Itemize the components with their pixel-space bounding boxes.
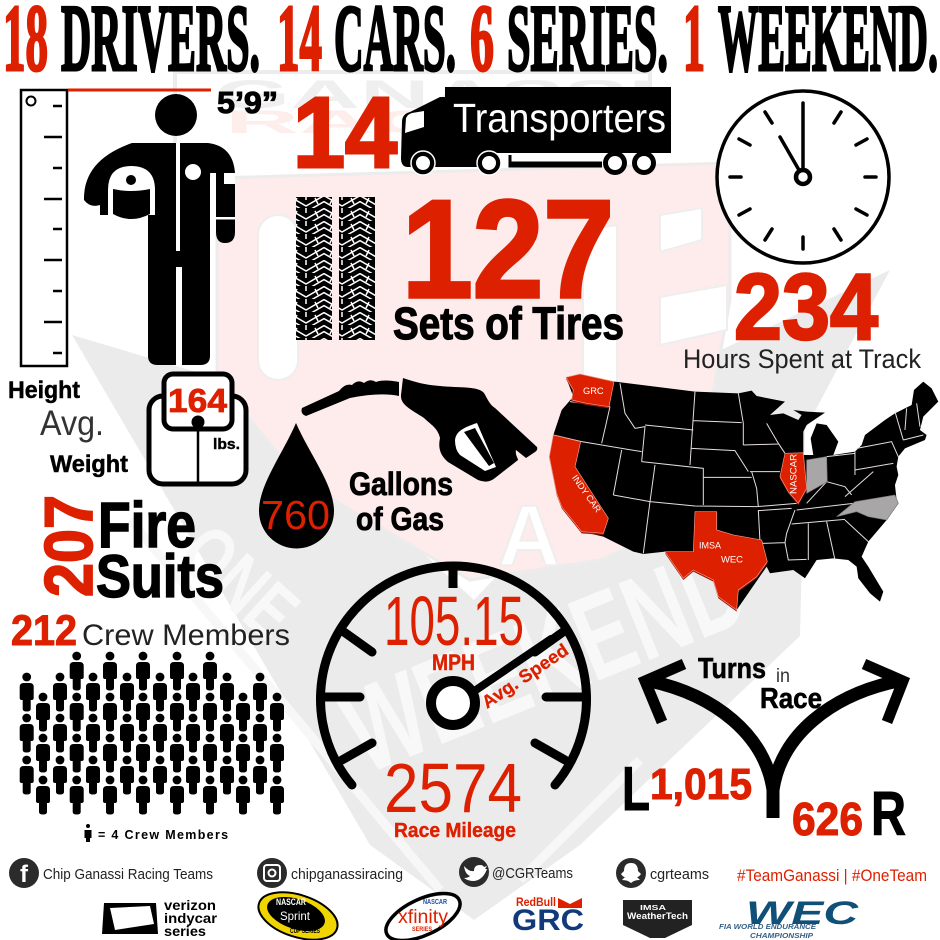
- background watermark logo: WEEKEND: [324, 517, 764, 799]
- logo: WEC: CHAMPIONSHIP: [750, 931, 814, 940]
- right turns: 626: [792, 793, 863, 845]
- logo: WEC: FIA WORLD ENDURANCE: [719, 922, 817, 931]
- turns label: [698, 653, 822, 715]
- icon: driver figure with helmet: [84, 94, 235, 365]
- icon: US map with highlighted states: IMSA: [699, 540, 721, 550]
- logo: IMSA weathertech: WeatherTech: [627, 911, 688, 921]
- icon: US map with highlighted states: INDY CAR: [570, 473, 603, 515]
- gas label: Gallons: [349, 466, 453, 502]
- logo: verizon indycar series: [102, 897, 218, 939]
- icon: transporter truck: [401, 87, 671, 175]
- speedometer gauge: [320, 566, 587, 842]
- icon: US map with highlighted states: [549, 374, 938, 612]
- logo: verizon indycar series: series: [164, 923, 206, 939]
- logo: nascar sprint cup: NASCAR: [276, 897, 306, 907]
- logo: nascar xfinity: SERIES: [412, 927, 432, 933]
- logo: nascar xfinity: NASCAR: [423, 899, 447, 906]
- avg caption: Avg.: [40, 404, 104, 443]
- height caption: Height: [8, 377, 80, 404]
- hours label: Hours Spent at Track: [683, 344, 921, 374]
- social: facebook: Chip Ganassi Racing Teams: [43, 866, 213, 883]
- social: snapchat: [616, 858, 709, 888]
- logo: red bull GRC: GRC: [512, 904, 584, 937]
- turns label: Turns: [698, 653, 766, 685]
- background watermark logo: A: [498, 488, 560, 584]
- icon: weight scale: lbs.: [213, 436, 240, 453]
- logo: nascar sprint cup: [253, 883, 343, 940]
- logo: IMSA weathertech: IMSA: [640, 905, 666, 912]
- left turns: 1,015: [650, 760, 752, 809]
- left turns: [622, 755, 752, 824]
- logo: red bull GRC: RedBull: [516, 895, 556, 909]
- turns label: in: [776, 666, 790, 687]
- fire suits label: Fire: [98, 489, 196, 561]
- tires number: 127: [402, 172, 614, 327]
- gas label: of Gas: [356, 501, 444, 537]
- mileage caption: Race Mileage: [394, 820, 516, 842]
- weight caption: Weight: [50, 451, 128, 478]
- icon: US map with highlighted states: GRC: [583, 386, 604, 396]
- icon: US map with highlighted states: NASCAR: [789, 453, 799, 494]
- title: [3, 0, 938, 91]
- icon: weight scale: [149, 374, 246, 484]
- background watermark logo: ONE: [164, 508, 315, 656]
- logo: nascar sprint cup: Sprint: [280, 909, 311, 923]
- icon: fuel nozzle: [302, 378, 537, 482]
- logo: IMSA weathertech: [623, 900, 692, 938]
- icon: forked turns arrow: [645, 664, 903, 818]
- background watermark logo: RACING: [225, 104, 630, 140]
- fire suits label: [96, 489, 224, 610]
- mileage value: 2574: [384, 749, 522, 827]
- speed unit: MPH: [432, 650, 475, 675]
- background watermark logo: GANASSI: [215, 73, 655, 117]
- fire suits label: Suits: [96, 543, 224, 610]
- right turns: R: [871, 780, 906, 849]
- fire suits number: 207: [31, 495, 107, 597]
- crew label: Crew Members: [82, 619, 290, 652]
- gas label: [349, 466, 453, 537]
- crew pictogram grid: [20, 652, 284, 814]
- icon: transporter truck: Transporters: [453, 95, 666, 141]
- left turns: L: [622, 755, 650, 824]
- social: snapchat: cgrteams: [650, 866, 709, 883]
- turns label: Race: [760, 683, 822, 715]
- logo: WEC: WEC: [746, 895, 859, 931]
- logo: verizon indycar series: verizon: [164, 897, 216, 913]
- icon: gas drop with value: 760: [261, 492, 330, 538]
- social: facebook: [9, 858, 213, 888]
- speed value: 105.15: [384, 582, 524, 660]
- logo: nascar xfinity: xfinity: [398, 907, 449, 928]
- logo: nascar xfinity: [379, 884, 467, 940]
- crew legend: = 4 Crew Members: [98, 828, 229, 842]
- social: instagram: [257, 858, 403, 888]
- tires label: Sets of Tires: [393, 298, 624, 349]
- icon: clock: [717, 91, 889, 263]
- icon: weight scale: 164: [168, 382, 228, 419]
- social: twitter: @CGRTeams: [492, 865, 573, 882]
- icon: gas drop with value: [259, 423, 334, 548]
- logo: nascar sprint cup: CUP SERIES: [290, 928, 320, 935]
- social: facebook: f: [20, 861, 29, 888]
- height label: 5’9”: [217, 85, 278, 120]
- icon: tire tracks: [296, 197, 375, 340]
- transporters count: 14: [293, 77, 397, 189]
- hours number: 234: [734, 254, 878, 359]
- crew number: 212: [11, 607, 77, 655]
- speed caption: Avg. Speed: [478, 640, 572, 712]
- social: twitter: [459, 857, 573, 887]
- social: instagram: chipganassiracing: [291, 866, 403, 883]
- icon: US map with highlighted states: WEC: [721, 554, 744, 564]
- right turns: [792, 780, 906, 849]
- height ruler: [21, 90, 211, 366]
- logo: verizon indycar series: indycar: [164, 910, 218, 926]
- logo: WEC: [719, 895, 859, 940]
